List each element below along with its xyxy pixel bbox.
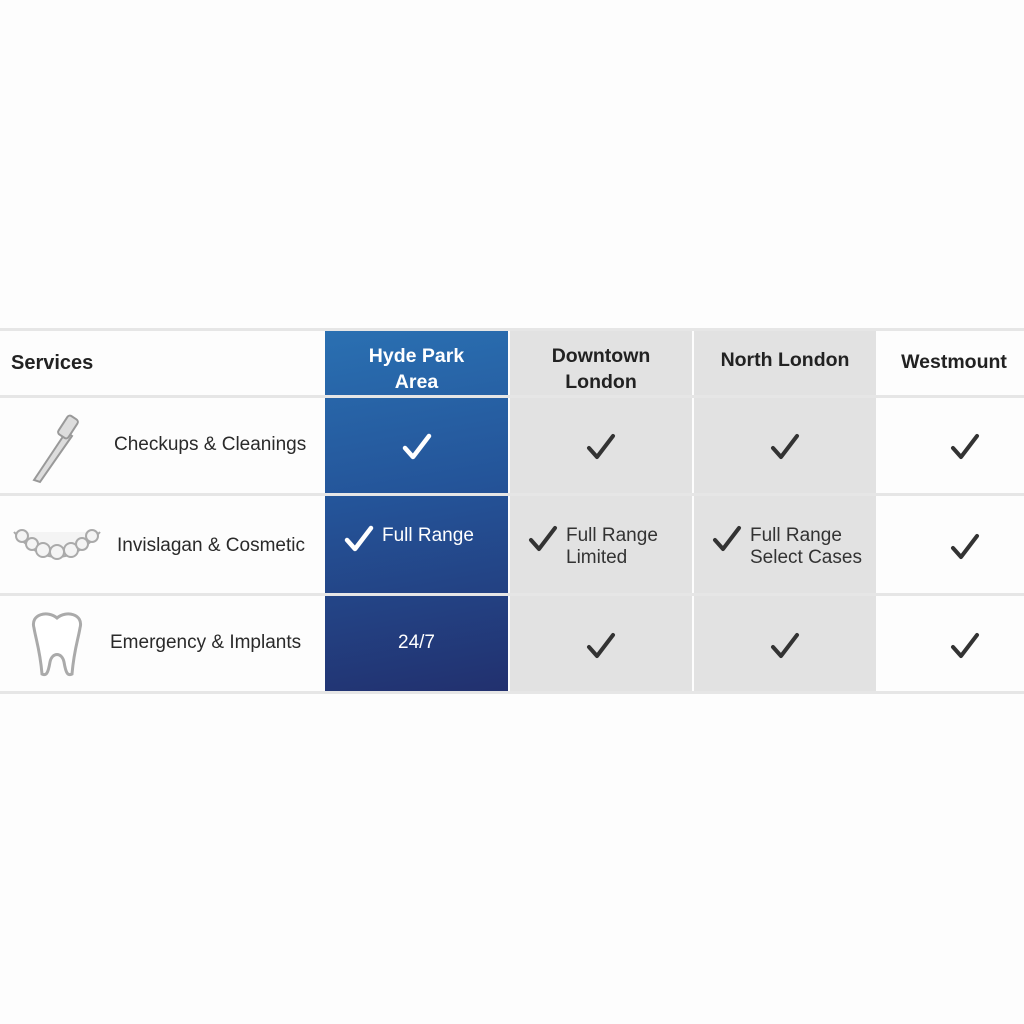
column: hyde park highlight (325, 331, 508, 693)
icon: tooth (32, 612, 82, 676)
column: downtown background (510, 331, 692, 692)
header: westmount: Westmount (901, 351, 1007, 373)
cells row 1 (402, 434, 432, 460)
header: downtown: Downtown (552, 345, 650, 367)
text: Full Range (566, 525, 658, 546)
header: hyde park: Hyde Park (369, 345, 464, 367)
cells row 2 (344, 526, 374, 552)
text: Full Range (382, 525, 474, 546)
row label: invisalign: Invislagan & Cosmetic (117, 535, 305, 556)
header: services: Services (11, 352, 93, 374)
header: hyde park: Area (395, 371, 438, 393)
header: north london: North London (721, 349, 849, 371)
text: Full Range (750, 525, 842, 546)
row label: emergency: Emergency & Implants (110, 632, 301, 653)
header: downtown: London (565, 371, 637, 393)
header: downtown (552, 345, 650, 393)
header: hyde park (369, 345, 464, 393)
icon: toothbrush (32, 414, 79, 484)
text: Select Cases (750, 547, 862, 568)
cells row 3: 24/7 (398, 632, 435, 653)
icon: aligner (13, 529, 101, 560)
column: north london background (694, 331, 876, 692)
row label: checkups: Checkups & Cleanings (114, 434, 306, 455)
text: Limited (566, 547, 627, 568)
